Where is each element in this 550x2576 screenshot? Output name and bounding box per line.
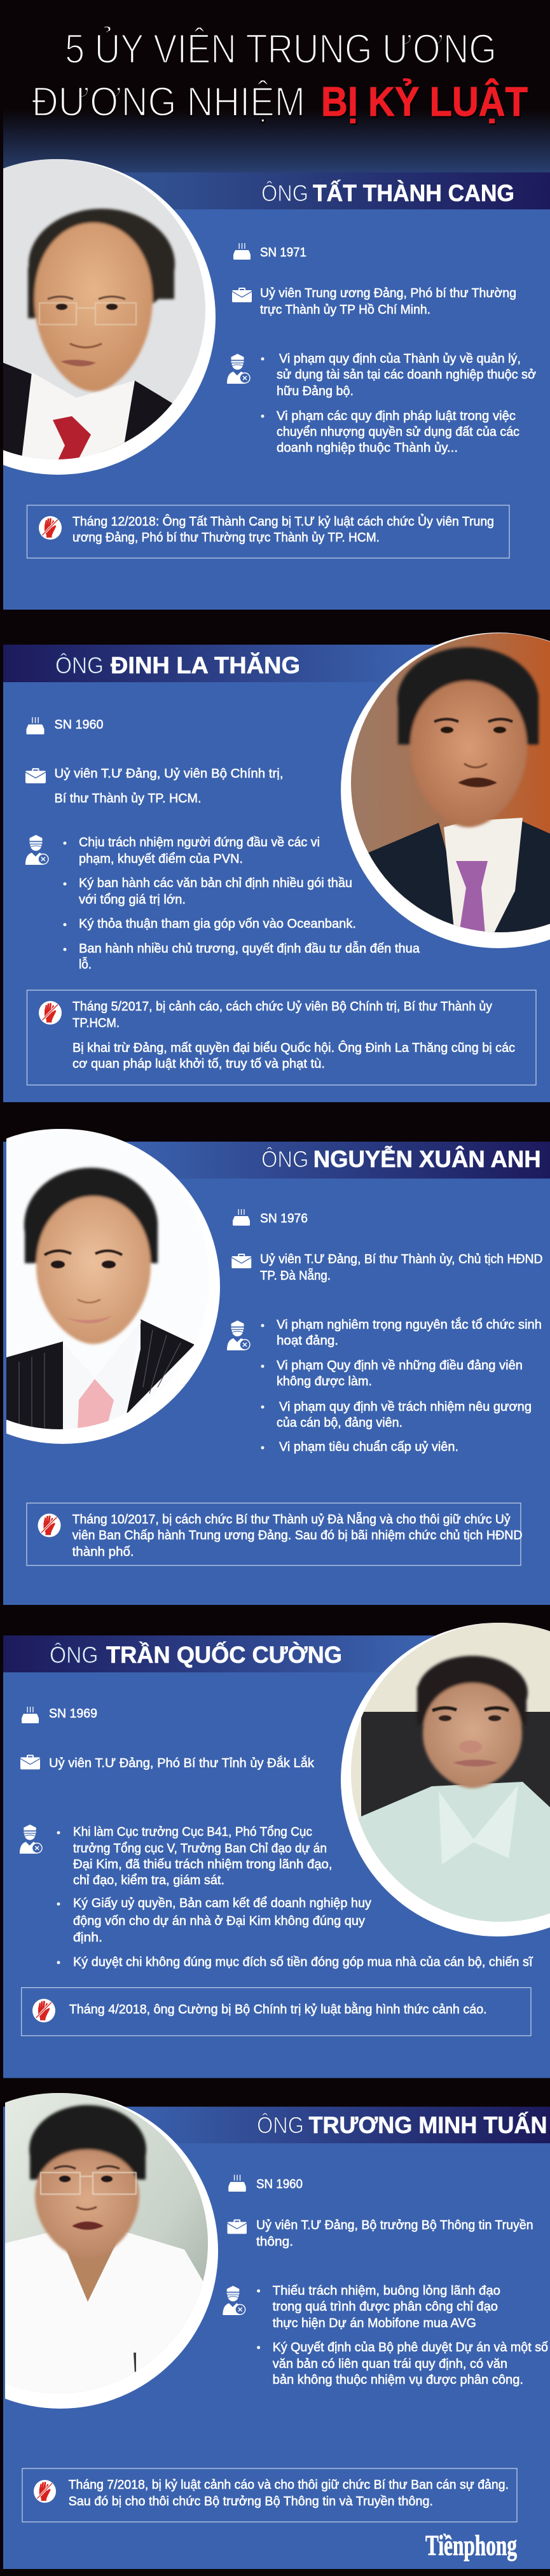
birth year row: SN 1960 [55,718,103,732]
position row [232,286,516,317]
violations list: Ký ban hành các văn bản chỉ định nhiều gói thầu [79,876,352,890]
position row: TP. Đà Nẵng. [260,1268,331,1283]
panel: Trần Quốc Cường [3,1620,550,2078]
name heading: ÔNG [55,652,104,678]
discipline callout [27,1503,523,1565]
violations list: chỉ đạo, kiểm tra, giám sát. [73,1873,224,1887]
violations list: động vốn cho dự án nhà ở Đại Kim không đúng quy [73,1914,365,1928]
violations list: định. [73,1931,102,1945]
position row: Uỷ viên T.Ư Đảng, Bộ trưởng Bộ Thông tin Truyền [256,2218,533,2232]
violations list [25,835,420,972]
panel 1 background [3,108,550,610]
violations list: bản không thuộc nhiệm vụ được phân công. [273,2373,523,2387]
discipline callout [22,2468,517,2522]
name heading: ÔNG [261,1146,309,1172]
discipline callout: ương Đảng, Phó bí thư Thường trực Thành ủy TP. HCM. [72,531,380,545]
birth year row [228,2175,303,2192]
violations list: với tổng giá trị lớn. [79,893,186,907]
position row: Uỷ viên T.Ư Đảng, Phó Bí thư Tỉnh ủy Đắk Lắk [49,1756,315,1770]
position row: Uỷ viên Trung ương Đảng, Phó bí thư Thường [260,286,516,300]
discipline callout [27,990,536,1085]
discipline callout: TP.HCM. [72,1016,120,1030]
title [32,25,528,125]
position row: Bí thư Thành ủy TP. HCM. [55,792,201,806]
title: ĐƯƠNG NHIỆM [32,78,305,125]
violations list: Khi làm Cục trưởng Cục B41, Phó Tổng Cục [73,1825,312,1839]
violations list: Thiếu trách nhiệm, buông lỏng lãnh đạo [273,2284,500,2298]
name heading: TẤT THÀNH CANG [313,180,514,206]
birth year row: SN 1960 [256,2178,303,2192]
violations list: Vi phạm quy định của Thành ủy về quản lý, [279,352,521,366]
panel: Nguyễn Xuân Anh [0,1126,550,1605]
birth year row [233,243,306,260]
discipline callout: Tháng 10/2017, bị cách chức Bí thư Thành uỷ Đà Nẵng và cho thôi giữ chức Uỷ [72,1512,511,1527]
panel 5 background [3,2106,550,2569]
position row [25,767,284,806]
name heading: NGUYỄN XUÂN ANH [313,1145,541,1172]
portrait: Nguyễn Xuân Anh [0,1126,220,1444]
name heading: ÔNG [261,180,308,206]
violations list: Ký duyệt chi không đúng mục đích số tiền đóng góp mua nhà của cán bộ, chiến sĩ [73,1955,533,1969]
birth year row: SN 1976 [260,1212,308,1226]
violations list: không được làm. [277,1375,372,1389]
discipline callout [27,505,509,558]
violations list: Vi phạm tiêu chuẩn cấp uỷ viên. [279,1440,458,1454]
name band [3,172,550,209]
panel: Trương Minh Tuấn [0,2090,550,2569]
discipline callout: Sau đó bị cho thôi chức Bộ trưởng Bộ Thông tin và Truyền thông. [69,2495,433,2509]
birth year row [22,1707,97,1723]
violations list: Ban hành nhiều chủ trương, quyết định đầu tư dẫn đến thua [79,941,420,956]
panel: Đinh La Thăng [3,627,550,1102]
panel 3 background [3,1142,550,1605]
violations list: Ký Giấy uỷ quyền, Bản cam kết để doanh nghiệp huy [73,1896,371,1910]
portrait: Trương Minh Tuấn [0,2090,218,2409]
birth year row: SN 1969 [49,1707,97,1721]
birth year row: SN 1971 [260,246,306,260]
portrait: Đinh La Thăng [341,627,550,948]
discipline callout: Tháng 12/2018: Ông Tất Thành Cang bị T.Ư kỷ luật cách chức Ủy viên Trung [72,514,494,529]
title: BỊ KỶ LUẬT [321,78,528,125]
name band [3,1635,550,1672]
portrait: Trần Quốc Cường [341,1620,550,1936]
position row [228,2218,533,2249]
position row: thông. [256,2235,293,2249]
discipline callout: Tháng 5/2017, bị cảnh cáo, cách chức Uỷ viên Bộ Chính trị, Bí thư Thành ủy [72,1000,492,1014]
panel: Tất Thành Cang [3,114,550,610]
violations list [20,1824,533,1969]
violations list: Chịu trách nhiệm người đứng đầu về các vi [79,836,320,850]
birth year row [233,1209,308,1226]
panel 4 background [3,1635,550,2078]
discipline callout: cơ quan pháp luật khởi tố, truy tố và phạt tù. [72,1057,325,1071]
violations list: của cán bộ, đảng viên. [277,1416,402,1430]
position row [231,1252,543,1283]
violations list: thực hiện Dự án Mobifone mua AVG [273,2316,476,2330]
discipline callout: viên Ban Chấp hành Trung ương Đảng. Sau đó bị bãi nhiệm chức chủ tịch HĐND [72,1529,523,1543]
violations list: sử dụng tài sản tại các doanh nghiệp thuộc sở [277,368,536,382]
discipline callout: Tháng 4/2018, ông Cường bị Bộ Chính trị kỷ luật bằng hình thức cảnh cáo. [69,2002,487,2017]
discipline callout: Tháng 7/2018, bị kỷ luật cảnh cáo và cho thôi giữ chức Bí thư Ban cán sự đảng. [69,2478,509,2492]
violations list: doanh nghiệp thuộc Thành ủy... [277,441,458,455]
violations list [227,352,536,455]
name heading: TRẦN QUỐC CƯỜNG [106,1641,342,1668]
violations list: phạm, khuyết điểm của PVN. [79,852,243,866]
discipline callout: thành phố. [72,1545,134,1559]
name band [3,645,550,682]
violations list: Đại Kim, đã thiếu trách nhiệm trong lãnh đạo, [73,1858,332,1872]
discipline callout [22,1988,531,2036]
portrait: Tất Thành Cang [0,153,216,475]
violations list: hoạt đảng. [277,1334,338,1348]
violations list: trưởng Tổng cục V, Trưởng Ban Chỉ đạo dự án [73,1842,327,1856]
violations list [227,1317,542,1454]
violations list: Ký Quyết định của Bộ phê duyệt Dự án và một số [273,2341,548,2355]
name heading: ÔNG [50,1642,98,1668]
violations list: Ký thỏa thuận tham gia góp vốn vào Oceanbank. [79,917,356,931]
violations list: lỗ. [79,957,92,972]
violations list: hữu Đảng bộ. [277,384,354,398]
birth year row [26,717,103,734]
violations list: văn bản có liên quan trái quy định, có văn [273,2357,507,2371]
violations list: Vi phạm các quy định pháp luật trong việc [277,409,516,423]
violations list [223,2284,548,2387]
panel 2 background [3,645,550,1102]
discipline callout: Bị khai trừ Đảng, mất quyền đại biểu Quốc hội. Ông Đinh La Thăng cũng bị các [72,1040,515,1055]
name heading: ĐINH LA THĂNG [111,652,300,678]
violations list: chuyển nhượng quyền sử dụng đất của các [277,425,519,439]
name band [3,1142,550,1179]
name heading: ÔNG [257,2112,304,2138]
position row: trực Thành ủy TP Hồ Chí Minh. [260,303,430,317]
position row: Uỷ viên T.Ư Đảng, Uỷ viên Bộ Chính trị, [55,767,284,781]
violations list: Vi phạm nghiêm trọng nguyên tắc tổ chức sinh [277,1317,542,1332]
position row: Uỷ viên T.Ư Đảng, Bí thư Thành ủy, Chủ tịch HĐND [260,1252,543,1266]
violations list: Vi phạm quy định về trách nhiệm nêu gương [279,1400,532,1414]
name heading: TRƯƠNG MINH TUẤN [309,2112,547,2138]
violations list: Vi phạm Quy định về những điều đảng viên [277,1359,523,1373]
name band [3,2106,550,2143]
violations list: trong quá trình được phân công chỉ đạo [273,2300,498,2314]
